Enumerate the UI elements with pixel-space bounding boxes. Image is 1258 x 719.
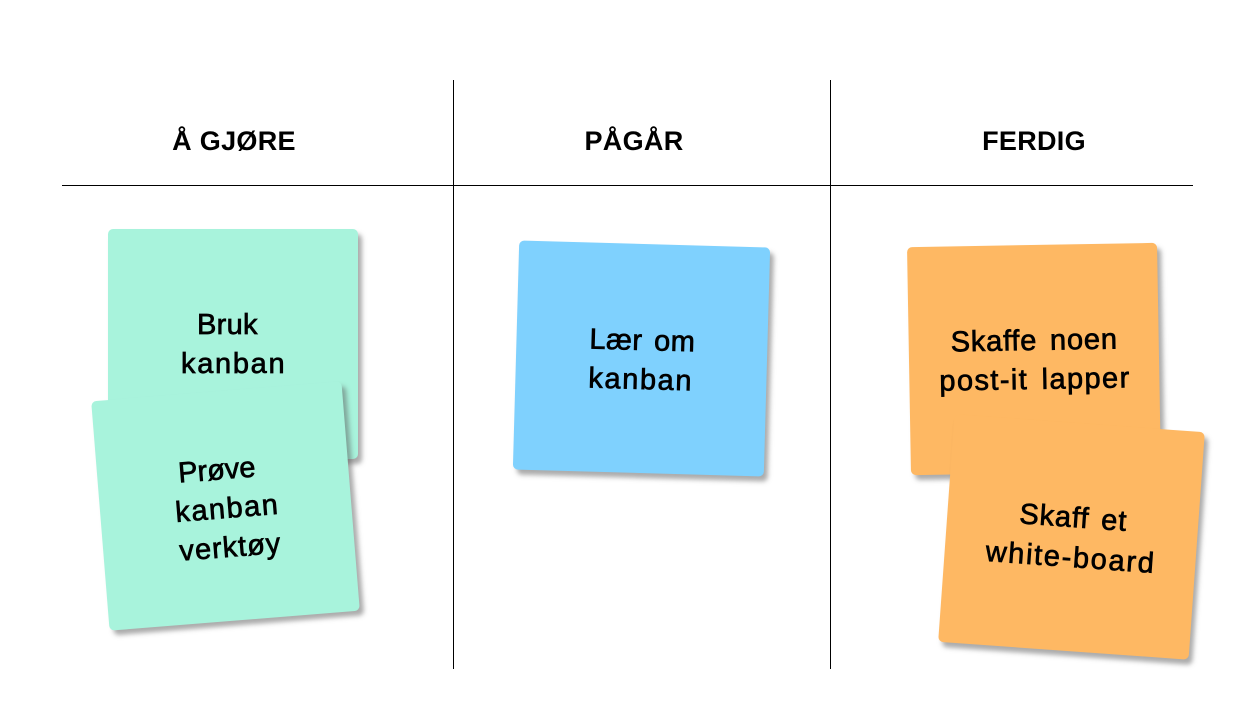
note: Skaffe noen post-it lapper: post-it lapper xyxy=(939,362,1131,398)
note: Prøve kanban verktøy: Prøve xyxy=(177,451,257,489)
heading: Å gjøre: Å GJØRE xyxy=(172,126,296,156)
note: Skaff et white-board: Skaff et xyxy=(1018,498,1128,538)
note: Bruk kanban: kanban xyxy=(181,348,286,380)
heading: Ferdig: FERDIG xyxy=(982,126,1086,156)
note: Prøve kanban verktøy xyxy=(91,381,360,630)
note: Lær om kanban xyxy=(513,241,770,476)
note: Skaffe noen post-it lapper: Skaffe noen xyxy=(950,324,1118,358)
note: Bruk kanban xyxy=(108,229,358,459)
note: Skaffe noen post-it lapper xyxy=(907,243,1161,475)
heading: Pågår: PÅGÅR xyxy=(584,126,684,156)
note: Lær om kanban: Lær om xyxy=(589,324,696,358)
note: Skaff et white-board: white-board xyxy=(985,536,1157,580)
note: Skaff et white-board xyxy=(938,414,1205,660)
note: Prøve kanban verktøy: verktøy xyxy=(178,527,283,567)
note: Bruk kanban: Bruk xyxy=(197,309,258,341)
note: Prøve kanban verktøy: kanban xyxy=(174,488,281,528)
note: Lær om kanban: kanban xyxy=(588,363,694,397)
